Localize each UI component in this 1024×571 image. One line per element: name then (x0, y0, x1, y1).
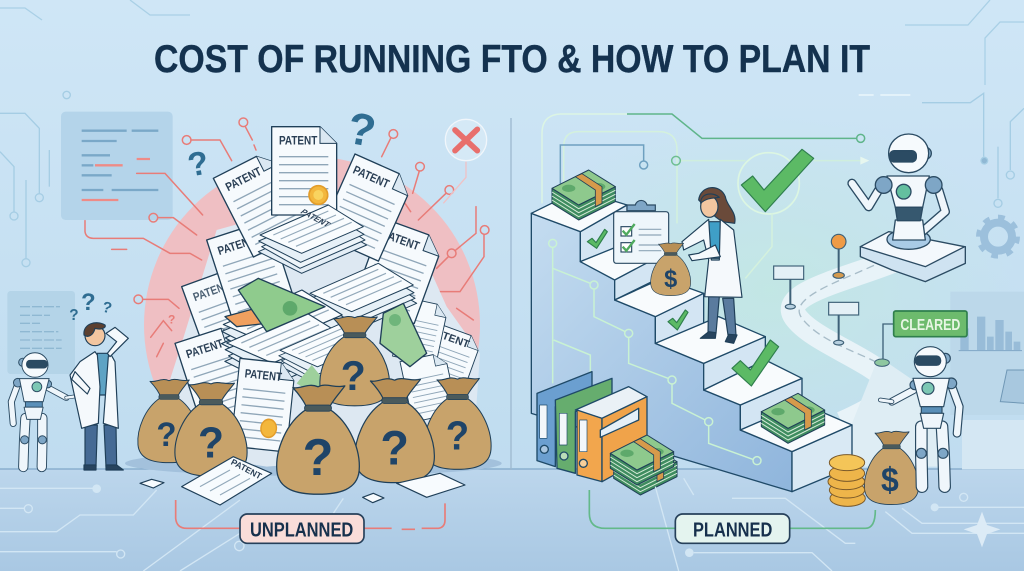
code panel (61, 112, 173, 220)
stairs (531, 190, 852, 492)
patent documents: PATENT (191, 278, 232, 304)
scientist head (85, 326, 105, 346)
scientist lab coat (70, 352, 118, 428)
scientist shoes (700, 332, 737, 343)
top circuit decoration (0, 0, 1024, 85)
money bags with question marks: ? (446, 413, 469, 459)
banknotes in pile (225, 278, 427, 390)
patent documents: PATENT (279, 133, 318, 147)
robot shoulders (875, 177, 892, 193)
stair side face (531, 213, 792, 492)
floor circuit traces (0, 485, 343, 571)
stair risers (580, 205, 802, 430)
title: COST OF RUNNING FTO & HOW TO PLAN IT (154, 38, 870, 81)
money stacks (552, 170, 825, 443)
patent documents: PATENT (351, 163, 392, 191)
pink burst circle (144, 157, 480, 493)
panel: unplanned (0, 91, 502, 571)
icon: gear (979, 217, 1017, 256)
pedestal (860, 232, 965, 282)
panel: planned (531, 93, 1024, 571)
binders (537, 372, 647, 482)
robot on pedestal (852, 134, 945, 249)
floor (0, 469, 1024, 571)
planned bracket (589, 490, 875, 528)
scientist legs (85, 425, 117, 467)
money bags with question marks (138, 316, 491, 494)
stair circuit traces (549, 239, 761, 465)
scientist hair (84, 323, 105, 336)
scientist question marks: ? (81, 289, 96, 316)
scientist coat (682, 219, 742, 297)
scientist shoes (84, 465, 123, 470)
cleared marker: CLEARED (900, 317, 960, 334)
question marks (168, 102, 380, 326)
patent documents: ATENT (434, 328, 471, 351)
right money bag: $ (881, 461, 899, 499)
road signs (774, 266, 859, 345)
question marks: ? (185, 145, 211, 184)
green checks (587, 149, 814, 386)
label: planned (675, 514, 790, 543)
small dollar bag: $ (664, 266, 678, 293)
scientist question marks: ? (69, 307, 79, 324)
robot chest light (896, 184, 911, 199)
loose paper stacks (221, 205, 417, 385)
patent documents: PATENT (381, 227, 422, 253)
scientist head (701, 196, 718, 217)
stair treads (531, 190, 852, 452)
scientist arm (689, 245, 720, 261)
robot: lower right (880, 347, 959, 487)
money bags with question marks: ? (341, 353, 366, 399)
bag ground shadow (125, 451, 502, 476)
X badge (443, 119, 487, 203)
patent documents: PATENT (184, 336, 226, 361)
front money stack (610, 435, 677, 495)
front patent document (231, 358, 296, 452)
upper right traces (859, 93, 1024, 207)
patent documents (175, 127, 482, 427)
winding road (793, 260, 942, 467)
scientist shirt (97, 353, 109, 395)
scientist hair back (699, 188, 735, 223)
orange milestone pin (831, 234, 846, 278)
red warning traces (85, 118, 489, 357)
scientist legs (708, 297, 736, 335)
paper pile base (160, 207, 480, 467)
gold coins (828, 455, 865, 506)
loose paper stacks: PATENT (298, 208, 332, 229)
fallen patent sheets: PATENT (229, 457, 264, 482)
central divider (510, 118, 512, 470)
small data panel (7, 291, 75, 374)
scientist shirt (709, 222, 720, 258)
patent documents: PATENT (223, 164, 264, 194)
right background dashboard (950, 292, 1024, 469)
robot torso (887, 176, 929, 207)
robot waist (895, 207, 923, 221)
label: unplanned: UNPLANNED (250, 519, 353, 542)
left circuit traces (0, 91, 70, 267)
sparkle star (964, 512, 1000, 547)
robot: left (11, 353, 76, 467)
unplanned bracket (176, 500, 445, 529)
label: unplanned (240, 514, 364, 543)
money bags with question marks: ? (303, 427, 333, 486)
small dollar bag (651, 243, 691, 296)
fallen patent sheets (140, 457, 465, 505)
money bags with question marks: ? (380, 422, 409, 476)
label: planned: PLANNED (693, 519, 772, 542)
robot arms (852, 183, 879, 207)
front patent document: PATENT (244, 368, 283, 384)
green circuit traces (542, 114, 869, 278)
scientist: planning (682, 188, 742, 343)
floor circuit traces (655, 478, 1024, 571)
money bags with question marks: ? (156, 415, 177, 454)
scientist question marks: ? (101, 299, 113, 317)
scientist question marks (69, 289, 113, 324)
right money bag (864, 431, 919, 505)
question marks: ? (168, 312, 175, 326)
clipboard (614, 200, 669, 263)
cleared marker (875, 311, 967, 366)
money bags with question marks: ? (198, 419, 224, 468)
robot base ring (887, 229, 930, 249)
robot head (919, 147, 931, 159)
scientist: confused (70, 323, 128, 470)
patent documents: PATENT (216, 233, 257, 258)
big check (741, 149, 814, 212)
scientist arms (72, 327, 128, 394)
question marks: ? (344, 102, 380, 157)
